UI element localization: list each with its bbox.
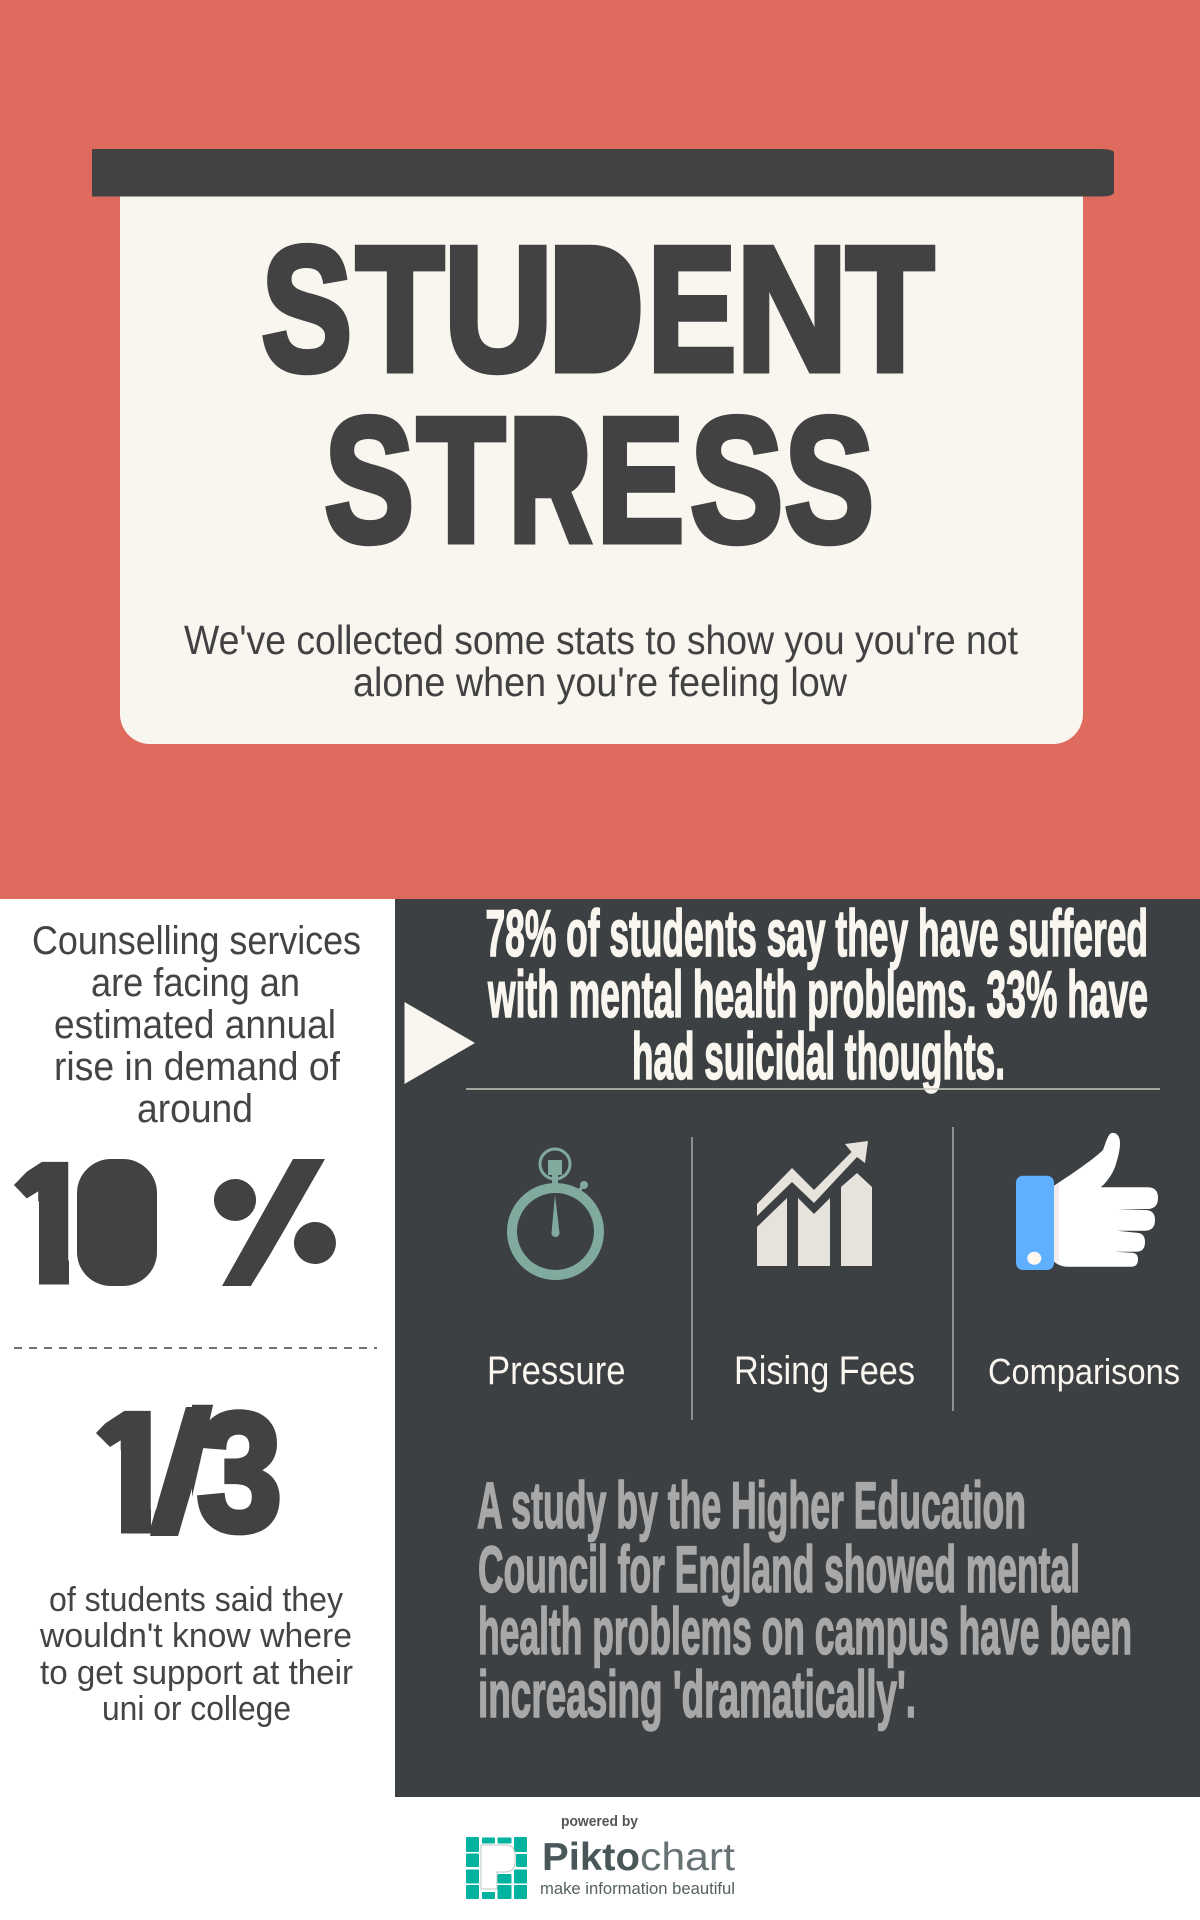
number text: 0 <box>71 1129 165 1317</box>
line: Counselling services <box>32 919 361 963</box>
statistic: one third: 3 <box>197 1378 282 1566</box>
icon: rising chart <box>757 1141 872 1266</box>
title <box>262 210 934 579</box>
title line: STRESS: S <box>690 381 783 579</box>
dark background <box>395 899 1200 1797</box>
icon: thumbs up <box>1016 1133 1158 1270</box>
line: are facing an <box>91 961 300 1005</box>
label: Rising Fees: Rising Fees <box>734 1349 915 1393</box>
tagline: make information beautiful <box>540 1880 735 1898</box>
card body <box>120 190 1083 744</box>
card top bar <box>92 149 1114 196</box>
text: counselling services <box>32 919 361 1131</box>
title line: STUDENT: N <box>736 210 848 408</box>
filled counter of percent, lower <box>302 1239 318 1255</box>
line: rise in demand of <box>54 1045 341 1089</box>
footer: Piktochart branding <box>466 1814 735 1899</box>
wordmark <box>542 1836 735 1879</box>
panel: left column statistics <box>2 919 377 1728</box>
wordmark light part: chart <box>640 1836 735 1879</box>
powered by text: powered by <box>561 1814 638 1830</box>
line: around <box>137 1087 253 1131</box>
panel: red header background <box>0 0 1200 899</box>
line: wouldn't know where <box>39 1617 352 1655</box>
dashed divider <box>14 1347 377 1349</box>
title line: STRESS: R <box>509 381 591 579</box>
icon: stopwatch <box>512 1149 599 1275</box>
wordmark bold part: Pikto <box>542 1836 640 1879</box>
title line: STUDENT: D <box>549 210 644 408</box>
filled counter of R <box>530 436 574 486</box>
text: of students <box>39 1581 353 1728</box>
label: Comparisons: Comparisons <box>988 1351 1180 1392</box>
panel: title card <box>92 149 1114 744</box>
number text: 1 <box>2 1129 96 1317</box>
filled counter of percent, upper <box>225 1189 241 1205</box>
subtitle <box>184 617 1019 705</box>
icon: Piktochart logo <box>466 1837 527 1899</box>
title line: STUDENT: S <box>262 210 352 408</box>
filled counter of D <box>570 268 622 350</box>
heading: 78 percent <box>486 896 1148 1093</box>
title line: STRESS: T <box>417 381 505 579</box>
icon: play triangle <box>404 1002 475 1084</box>
subtitle line 2: alone when you're feeling low <box>353 659 847 705</box>
filled counter of zero <box>95 1175 141 1270</box>
statistic: one third: / <box>153 1378 210 1566</box>
title line: STUDENT: T <box>356 210 444 408</box>
text: study paragraph <box>477 1468 1132 1731</box>
title line: STUDENT: U <box>444 210 553 408</box>
statistic: one third: 1 <box>85 1378 178 1566</box>
title line: STUDENT: E <box>648 210 736 408</box>
title line: STRESS: S <box>325 381 414 579</box>
title line: STRESS: E <box>597 381 684 579</box>
panel: right dark statistics <box>395 896 1200 1797</box>
line: of students said they <box>49 1581 343 1619</box>
statistic: 10 percent <box>14 1159 336 1286</box>
title line: STUDENT: T <box>846 210 934 408</box>
subtitle line 1: We've collected some stats to show you you're not <box>184 617 1019 663</box>
line: uni or college <box>102 1690 291 1728</box>
label: Pressure: Pressure <box>487 1349 626 1393</box>
title line: STRESS: S <box>785 381 874 579</box>
line: estimated annual <box>54 1003 336 1047</box>
line: to get support at their <box>40 1654 353 1692</box>
number text: % <box>198 1129 338 1317</box>
